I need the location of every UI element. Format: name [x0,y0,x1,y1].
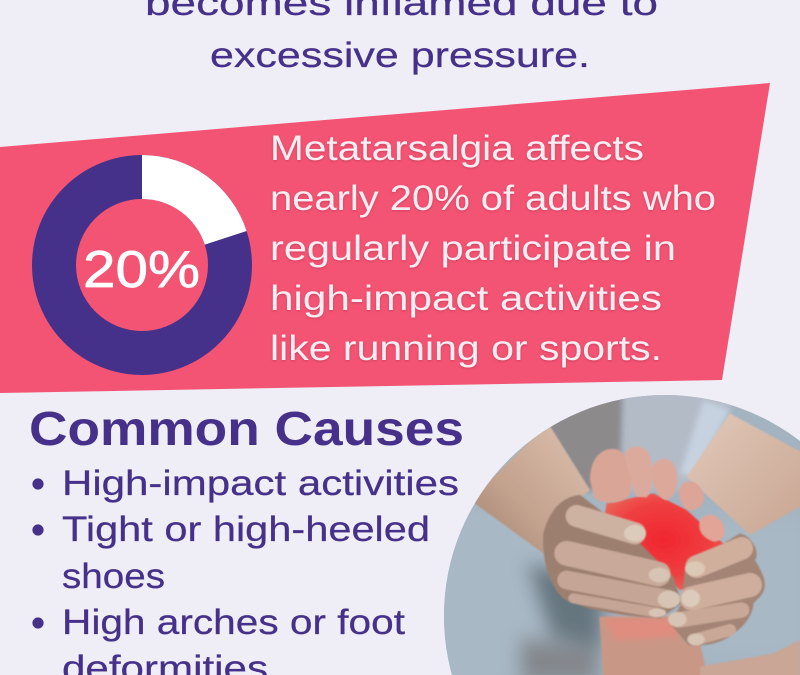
list: causes [32,464,459,675]
right hand [668,533,765,645]
right forearm [687,413,800,535]
blurred clothing background [444,505,612,675]
left forearm [470,423,590,553]
donut label: 20% [83,241,200,299]
item: high arches or foot deformities [32,603,405,675]
inflamed forefoot [600,493,727,590]
item: tight or high-heeled shoes [32,510,430,596]
statistic text [270,129,716,368]
shirt [548,395,732,493]
statistic text: like running or sports. [270,329,662,368]
donut chart: 20% [54,155,247,353]
left hand [543,495,682,618]
statistic text: Metatarsalgia affects [270,129,644,168]
statistic text: regularly participate in [270,229,676,268]
statistic text: nearly 20% of adults who [270,179,716,218]
item: high-impact activities: High-impact activities [62,464,459,503]
heading: Common Causes: Common Causes [29,403,464,456]
photo: hands holding a painful foot [423,383,800,675]
intro text [145,0,658,75]
intro text: excessive pressure. [210,36,590,75]
item: tight or high-heeled shoes: shoes [62,557,165,596]
statistic text: high-impact activities [270,279,662,318]
panel: statistic banner [0,83,770,393]
item: tight or high-heeled shoes: Tight or high-heeled [62,510,430,549]
toes [590,446,725,542]
item: high arches or foot deformities: High arches or foot [62,603,405,642]
foot sole [599,617,707,675]
